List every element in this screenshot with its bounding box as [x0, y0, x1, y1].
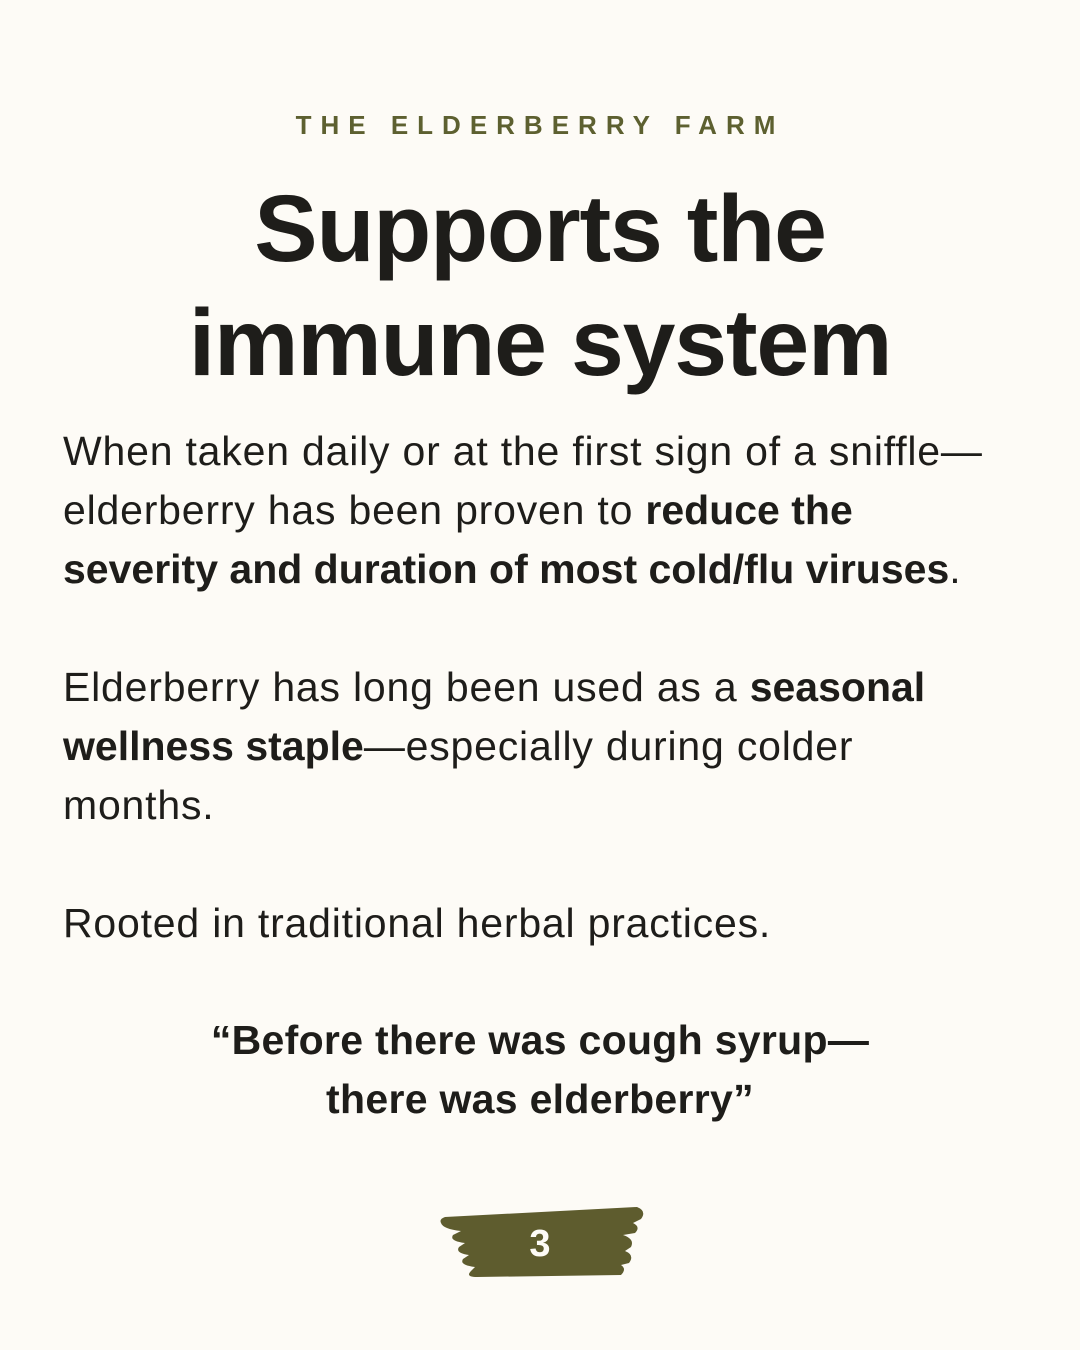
paragraph 3: Rooted in traditional herbal practices. — [63, 900, 771, 946]
paragraph 2 — [62, 664, 925, 828]
brand header: THE ELDERBERRY FARM — [296, 110, 784, 140]
title: immune system — [189, 290, 891, 396]
paragraph 1: elderberry has been proven to reduce the — [63, 487, 853, 533]
paragraph 2: months. — [63, 782, 214, 828]
title — [189, 176, 891, 396]
page number badge: 3 — [529, 1223, 551, 1265]
paragraph 2: Elderberry has long been used as a seasonal — [63, 664, 925, 710]
paragraph 2: wellness staple—especially during colder — [63, 723, 853, 769]
paragraph 1 — [63, 428, 983, 592]
quote: there was elderberry” — [326, 1076, 754, 1122]
title: Supports the — [254, 176, 826, 282]
paragraph 1: When taken daily or at the first sign of a sniffle— — [63, 428, 983, 474]
quote — [211, 1017, 869, 1122]
body text — [62, 428, 983, 946]
page number badge — [440, 1207, 644, 1277]
paragraph 1: severity and duration of most cold/flu viruses. — [63, 546, 961, 592]
quote: “Before there was cough syrup— — [211, 1017, 869, 1063]
